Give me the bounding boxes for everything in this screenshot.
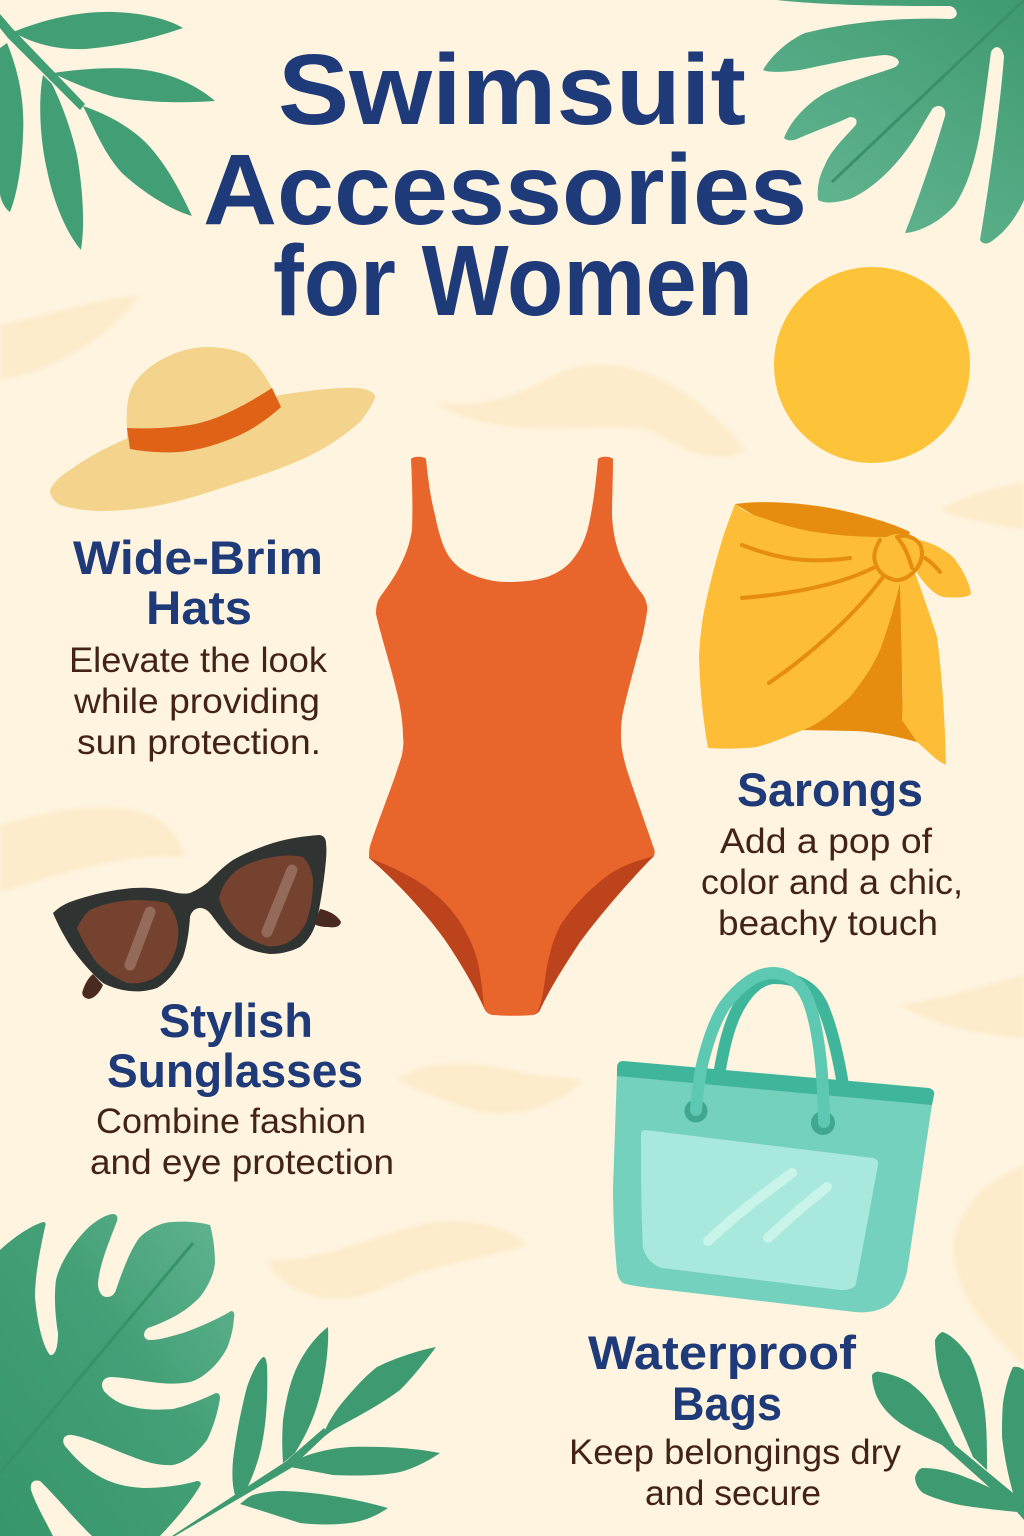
title <box>203 34 807 337</box>
heading + text: sarongs <box>701 763 963 943</box>
icon: wide-brim hat <box>50 347 375 511</box>
heading + text: waterproof bags: Keep belongings dry <box>569 1433 902 1472</box>
heading + text: wide-brim hats: while providing <box>73 682 320 721</box>
leaf cluster: top left <box>0 12 215 250</box>
sand swashes background <box>0 296 1024 1365</box>
heading + text: waterproof bags <box>569 1326 902 1513</box>
title: Accessories <box>203 134 807 246</box>
icon: waterproof bag <box>613 973 934 1312</box>
heading + text: waterproof bags: Bags <box>672 1377 782 1430</box>
title: for Women <box>273 225 753 337</box>
heading + text: stylish sunglasses: Stylish <box>159 994 313 1047</box>
heading + text: wide-brim hats: Wide-Brim <box>73 531 323 584</box>
heading + text: waterproof bags: and secure <box>645 1474 821 1513</box>
heading + text: stylish sunglasses <box>90 994 394 1182</box>
leaf: top right <box>763 0 1024 244</box>
heading + text: wide-brim hats: sun protection. <box>77 723 321 762</box>
icon: sunglasses <box>53 835 341 999</box>
icon: sarong <box>699 502 971 765</box>
heading + text: stylish sunglasses: Combine fashion <box>96 1102 366 1141</box>
heading + text: sarongs: Sarongs <box>737 763 923 816</box>
heading + text: waterproof bags: Waterproof <box>588 1326 856 1379</box>
leaf cluster: bottom right <box>872 1332 1024 1520</box>
heading + text: stylish sunglasses: Sunglasses <box>107 1044 363 1097</box>
heading + text: wide-brim hats <box>69 531 328 762</box>
heading + text: wide-brim hats: Hats <box>146 581 252 634</box>
icon: sun <box>774 267 970 463</box>
heading + text: sarongs: beachy touch <box>718 904 938 943</box>
leaf cluster: bottom centre-left <box>172 1327 440 1536</box>
leaf: bottom left monstera <box>0 1214 234 1536</box>
heading + text: sarongs: color and a chic, <box>701 863 963 902</box>
heading + text: sarongs: Add a pop of <box>720 822 932 861</box>
heading + text: stylish sunglasses: and eye protection <box>90 1143 394 1182</box>
icon: orange swimsuit <box>369 457 655 1016</box>
heading + text: wide-brim hats: Elevate the look <box>69 641 328 680</box>
title: Swimsuit <box>278 34 746 146</box>
